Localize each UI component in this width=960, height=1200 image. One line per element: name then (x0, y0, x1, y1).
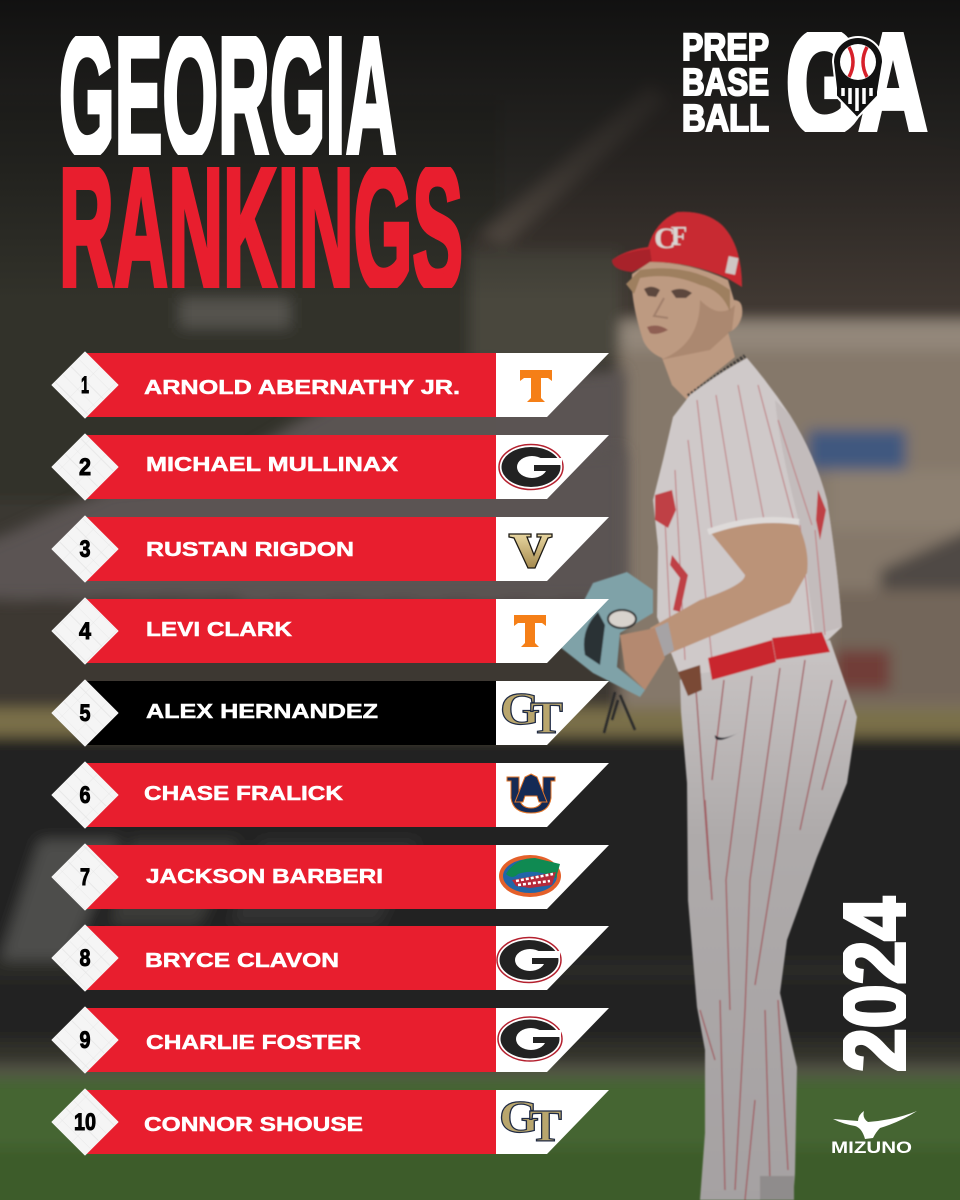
row 2 (52, 434, 609, 500)
row 5: G (500, 683, 540, 734)
row 2: MICHAEL MULLINAX (146, 454, 399, 476)
row 4: 4 (79, 618, 92, 645)
Mizuno logo (831, 1111, 917, 1157)
glove (560, 572, 653, 697)
row 8: 8 (80, 945, 90, 972)
cap: F (671, 221, 687, 251)
row 10 (52, 1089, 609, 1155)
row 8: BRYCE CLAVON (145, 950, 339, 972)
row 10: CONNOR SHOUSE (144, 1114, 363, 1136)
row 6: 6 (80, 782, 90, 809)
row 5 (52, 680, 609, 746)
pants (680, 640, 857, 1200)
row 7: JACKSON BARBERI (146, 866, 383, 888)
logo wordmark: PREP (682, 27, 769, 69)
belt (708, 632, 830, 680)
row 10: 10 (74, 1109, 96, 1136)
logo wordmark: BASE (682, 62, 769, 104)
row 3: RUSTAN RIGDON (146, 539, 354, 561)
title (60, 36, 462, 288)
hand (620, 628, 665, 690)
row 5: T (530, 692, 563, 743)
Mizuno wordmark: MIZUNO (831, 1138, 912, 1157)
row 10: G (499, 1091, 539, 1142)
sock (760, 1176, 794, 1200)
row 6 (52, 762, 609, 828)
watch band (655, 622, 674, 658)
year 2024 vertical: 2024 (825, 897, 927, 1072)
row 1 (52, 352, 609, 418)
row 10: T (529, 1100, 562, 1151)
row 5: 5 (80, 700, 90, 727)
row 4: LEVI CLARK (146, 619, 293, 641)
row 2: 2 (79, 454, 91, 481)
logo letters GA: G (786, 1, 862, 164)
row 1: ARNOLD ABERNATHY JR. (144, 377, 460, 399)
cap (612, 212, 742, 287)
text: GEORGIA (59, 0, 397, 193)
row 7: 7 (80, 864, 90, 891)
player photo (560, 212, 857, 1200)
glove webbing (584, 612, 605, 665)
row 6: CHASE FRALICK (144, 783, 344, 805)
logo letters GA (788, 32, 928, 132)
Mizuno bird mark (833, 1111, 917, 1139)
arm (650, 522, 808, 660)
sleeve cuff (708, 520, 799, 532)
jersey pinstripes (664, 385, 825, 660)
logo wordmark: BALL (682, 98, 769, 140)
row 9: CHARLIE FOSTER (146, 1032, 362, 1054)
glove laces (604, 692, 635, 733)
row 4 (52, 598, 609, 664)
Prep Baseball Georgia logo (683, 32, 928, 132)
row 3 (52, 516, 609, 582)
row 7 (52, 844, 609, 910)
row 5: ALEX HERNANDEZ (146, 701, 378, 723)
nike swoosh (715, 731, 742, 740)
cap: C (654, 222, 676, 255)
row 3: 3 (80, 536, 90, 563)
row 9 (52, 1007, 609, 1073)
rankings list (52, 352, 609, 1155)
head (626, 262, 745, 400)
pants pinstripes (696, 660, 846, 1200)
logo wordmark (682, 27, 769, 140)
logo ball and shield (833, 37, 883, 118)
blurred roofs (0, 370, 625, 600)
row 1: 1 (81, 372, 89, 399)
row 9: 9 (80, 1027, 90, 1054)
jersey (653, 358, 842, 676)
belt buckle (678, 665, 702, 696)
row 8 (52, 925, 609, 991)
jersey lettering (655, 490, 826, 612)
